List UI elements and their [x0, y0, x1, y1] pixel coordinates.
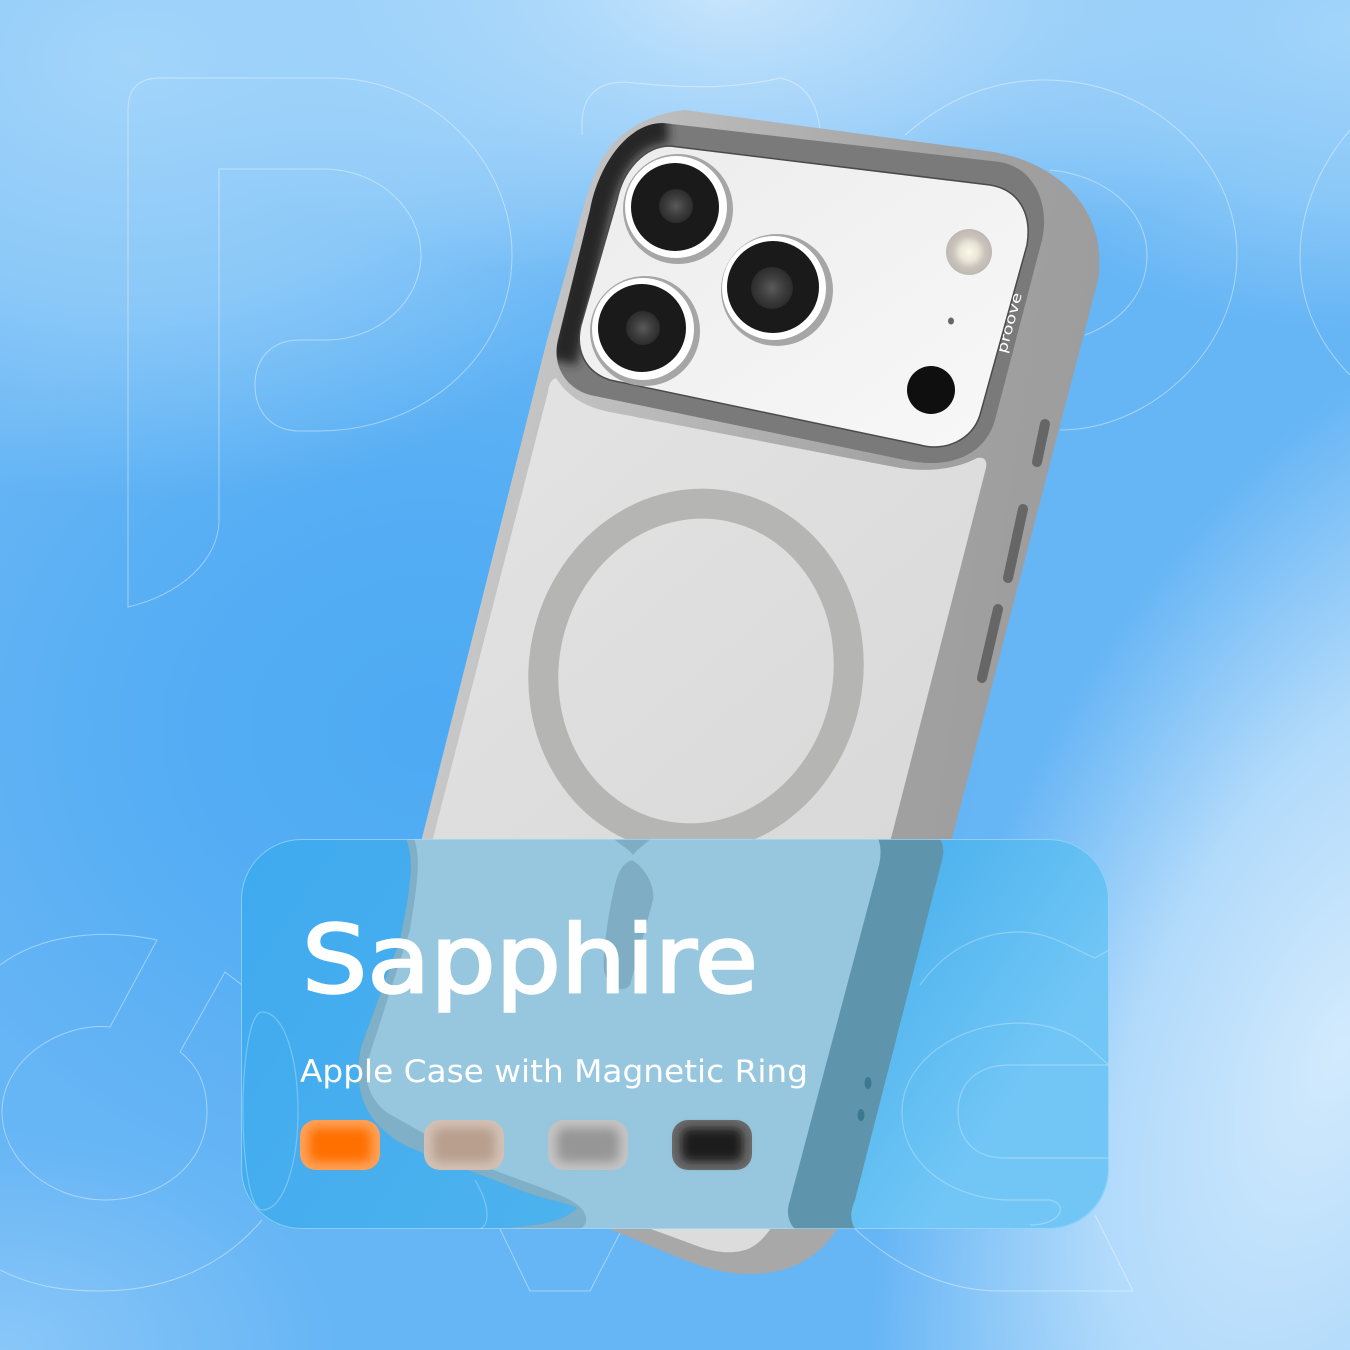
- title: Sapphire: [302, 906, 758, 1015]
- magnetic ring: [512, 475, 880, 867]
- outline letter o right edge: [1300, 130, 1350, 375]
- microphone: [948, 318, 954, 324]
- clear back panel: [430, 378, 986, 850]
- lidar sensor: [907, 366, 955, 414]
- case bottom below panel: [600, 1225, 840, 1274]
- swatch black: [672, 1120, 752, 1170]
- lens middle: [721, 234, 833, 346]
- camera bezel: [556, 123, 1044, 463]
- swatch orange: [300, 1120, 380, 1170]
- outline letter G right: [855, 1215, 1133, 1291]
- side button volume up: [1008, 509, 1023, 578]
- subtitle: Apple Case with Magnetic Ring: [300, 1054, 808, 1090]
- glass info panel: [241, 839, 1109, 1229]
- ring seen through glass: [604, 839, 653, 989]
- case outer shell: [419, 110, 1099, 850]
- flash: [946, 229, 992, 275]
- outline letter G left: [0, 934, 262, 1291]
- side button volume down: [982, 609, 998, 678]
- swatch gray: [548, 1120, 628, 1170]
- outline letter o: [905, 80, 1237, 430]
- case inner light area: [366, 839, 881, 1229]
- faint outlines through glass: [243, 932, 1109, 1229]
- phone seen through glass: [243, 839, 1109, 1229]
- mic holes: [864, 1077, 872, 1089]
- outline letter P: [128, 78, 512, 607]
- case left rim: [358, 839, 586, 1229]
- outline letter v: [500, 1229, 622, 1291]
- proove logo: proove: [994, 291, 1026, 355]
- camera white plate: [579, 146, 1028, 447]
- phone with case: [419, 110, 1099, 1274]
- panel border: [242, 840, 1108, 1228]
- swatch beige: [424, 1120, 504, 1170]
- back panel bottom below panel: [640, 1225, 773, 1252]
- panel background: [241, 839, 1109, 1229]
- lens top: [623, 154, 733, 264]
- side button top: [1037, 424, 1045, 462]
- case dark rim: [358, 839, 943, 1229]
- lens bottom: [590, 276, 700, 386]
- outline letter r: [582, 78, 820, 135]
